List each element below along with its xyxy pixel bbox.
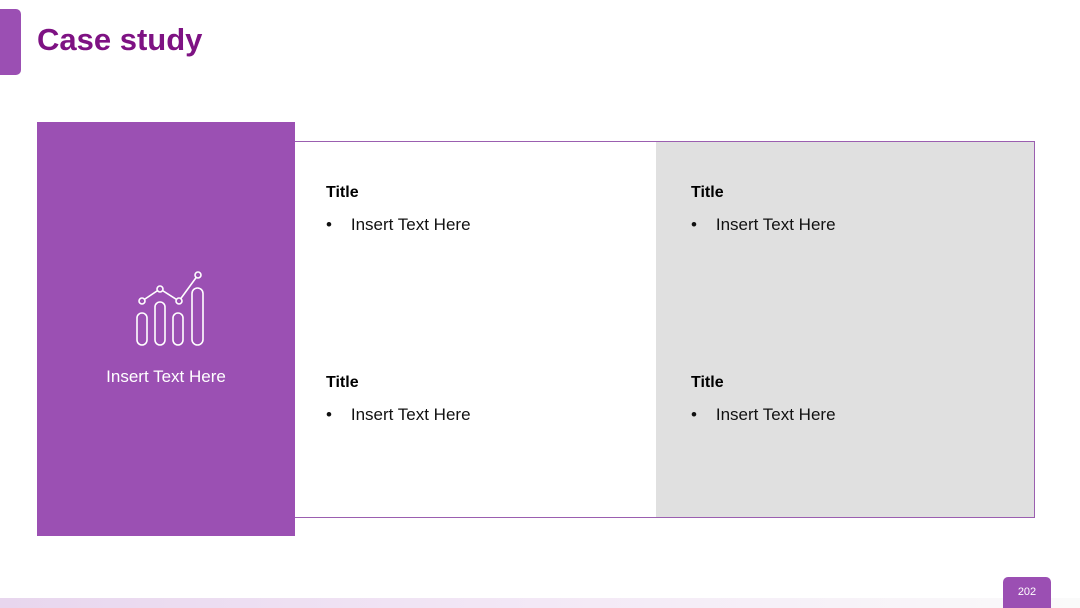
- panel: grey right half: [656, 142, 1034, 517]
- text: left panel caption: Insert Text Here: [106, 367, 226, 386]
- text block: top-left: Title: [326, 184, 359, 201]
- page number badge: 202: [1018, 586, 1036, 598]
- title: Case study: [37, 22, 202, 57]
- panel: outlined content box: [294, 141, 1035, 518]
- footer gradient strip: [0, 598, 1080, 608]
- text block: top-right: [691, 184, 836, 234]
- title accent bar: [0, 9, 21, 75]
- text block: bottom-left: Title: [326, 374, 359, 391]
- text block: bottom-right: • Insert Text Here: [691, 405, 836, 424]
- text block: bottom-right: Title: [691, 374, 724, 391]
- text block: top-right: • Insert Text Here: [691, 215, 836, 234]
- page number badge: [1003, 577, 1051, 608]
- text block: bottom-left: [326, 374, 471, 424]
- icon: chart: [136, 271, 204, 346]
- text block: bottom-left: • Insert Text Here: [326, 405, 471, 424]
- text block: top-right: Title: [691, 184, 724, 201]
- text block: top-left: • Insert Text Here: [326, 215, 471, 234]
- text block: top-left: [326, 184, 471, 234]
- panel: purple left: [37, 122, 295, 536]
- text block: bottom-right: [691, 374, 836, 424]
